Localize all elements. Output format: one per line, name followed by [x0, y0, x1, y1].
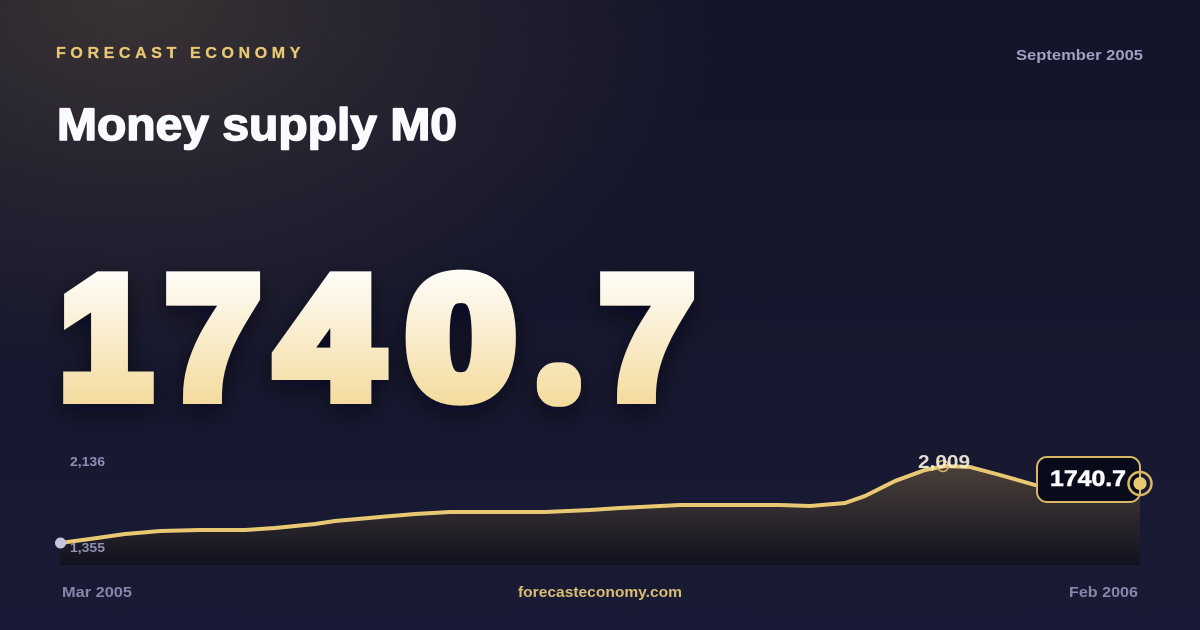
big value: . — [553, 352, 565, 396]
website: forecasteconomy.com — [518, 584, 682, 601]
max axis label: 2,136 — [70, 454, 105, 469]
area under line — [60, 466, 1140, 565]
brand label: FORECAST ECONOMY — [56, 45, 305, 62]
big value: 0 — [406, 242, 515, 433]
start date: Mar 2005 — [62, 584, 132, 601]
peak marker — [938, 460, 948, 472]
peak label: 2,009 — [918, 452, 970, 472]
end date: Feb 2006 — [1069, 584, 1138, 601]
sparkline chart — [55, 452, 1152, 565]
big value — [60, 241, 694, 434]
start dot — [55, 538, 66, 548]
line — [60, 466, 1140, 543]
min axis label: 1,355 — [70, 540, 105, 555]
end marker — [1128, 472, 1152, 495]
date label: September 2005 — [1016, 47, 1143, 64]
current value callout: 1740.7 — [1050, 466, 1126, 491]
big value: 4 — [277, 243, 381, 434]
title: Money supply M0 — [57, 99, 457, 150]
big value: 7 — [600, 241, 694, 433]
big value: 1 — [60, 242, 151, 433]
current value callout — [1037, 457, 1140, 502]
big value: 7 — [166, 241, 260, 433]
